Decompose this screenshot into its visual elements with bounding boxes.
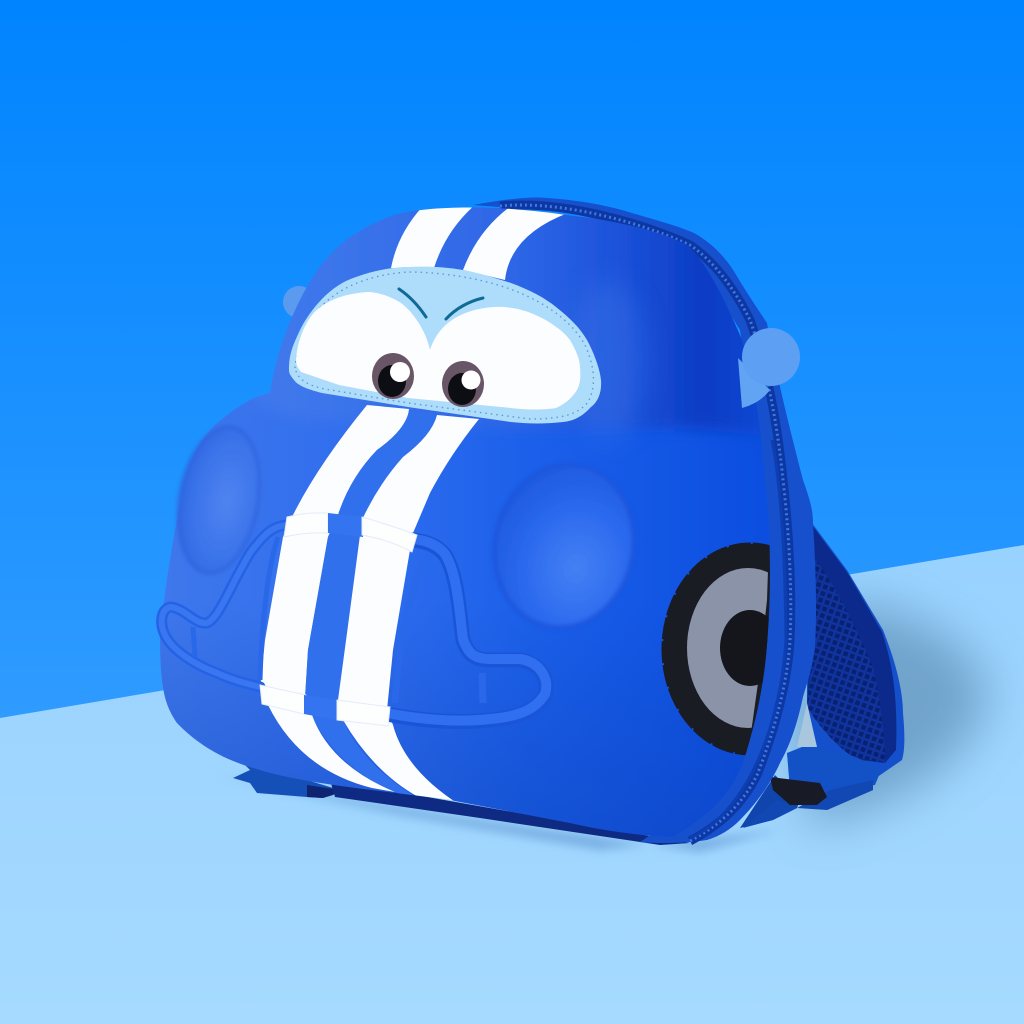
- floor: [0, 545, 1024, 1024]
- bottom dark edge: [330, 780, 690, 845]
- right mirror: [738, 328, 800, 408]
- hood bottom shading: [163, 679, 745, 837]
- lower hood bar: [260, 685, 390, 726]
- trim inner lines right: [395, 560, 483, 703]
- windshield side glow: [582, 290, 643, 431]
- left mirror: [283, 286, 315, 318]
- wheel: [662, 542, 770, 756]
- hood stripe left upper: [260, 405, 409, 700]
- embossed trim left: [162, 525, 287, 687]
- left pupil: [372, 353, 414, 399]
- embossed trim right: [392, 540, 546, 722]
- roof stripe right: [463, 206, 568, 280]
- stitching: [295, 272, 593, 419]
- trim inner lines left: [193, 537, 278, 680]
- hood stripe left lower: [268, 705, 395, 792]
- shoulder strap: [740, 523, 904, 828]
- roof stripe left: [391, 204, 476, 268]
- eye whites: [296, 292, 580, 410]
- left fender: [168, 420, 270, 580]
- right pupil: [442, 361, 484, 407]
- main body shell: [150, 190, 790, 850]
- left eyebrow: [399, 289, 426, 317]
- ground shadow: [215, 775, 780, 852]
- hood stripe middle: [305, 411, 425, 796]
- upper hood bar: [284, 513, 417, 552]
- lower left strap: [233, 760, 340, 798]
- cabin section: [258, 208, 760, 435]
- windshield face: [289, 267, 601, 424]
- hood stripe right: [338, 415, 479, 805]
- zipper gusset: [473, 197, 816, 843]
- right fender: [479, 451, 649, 641]
- cast shadow: [790, 600, 987, 825]
- right eyebrow: [446, 298, 483, 319]
